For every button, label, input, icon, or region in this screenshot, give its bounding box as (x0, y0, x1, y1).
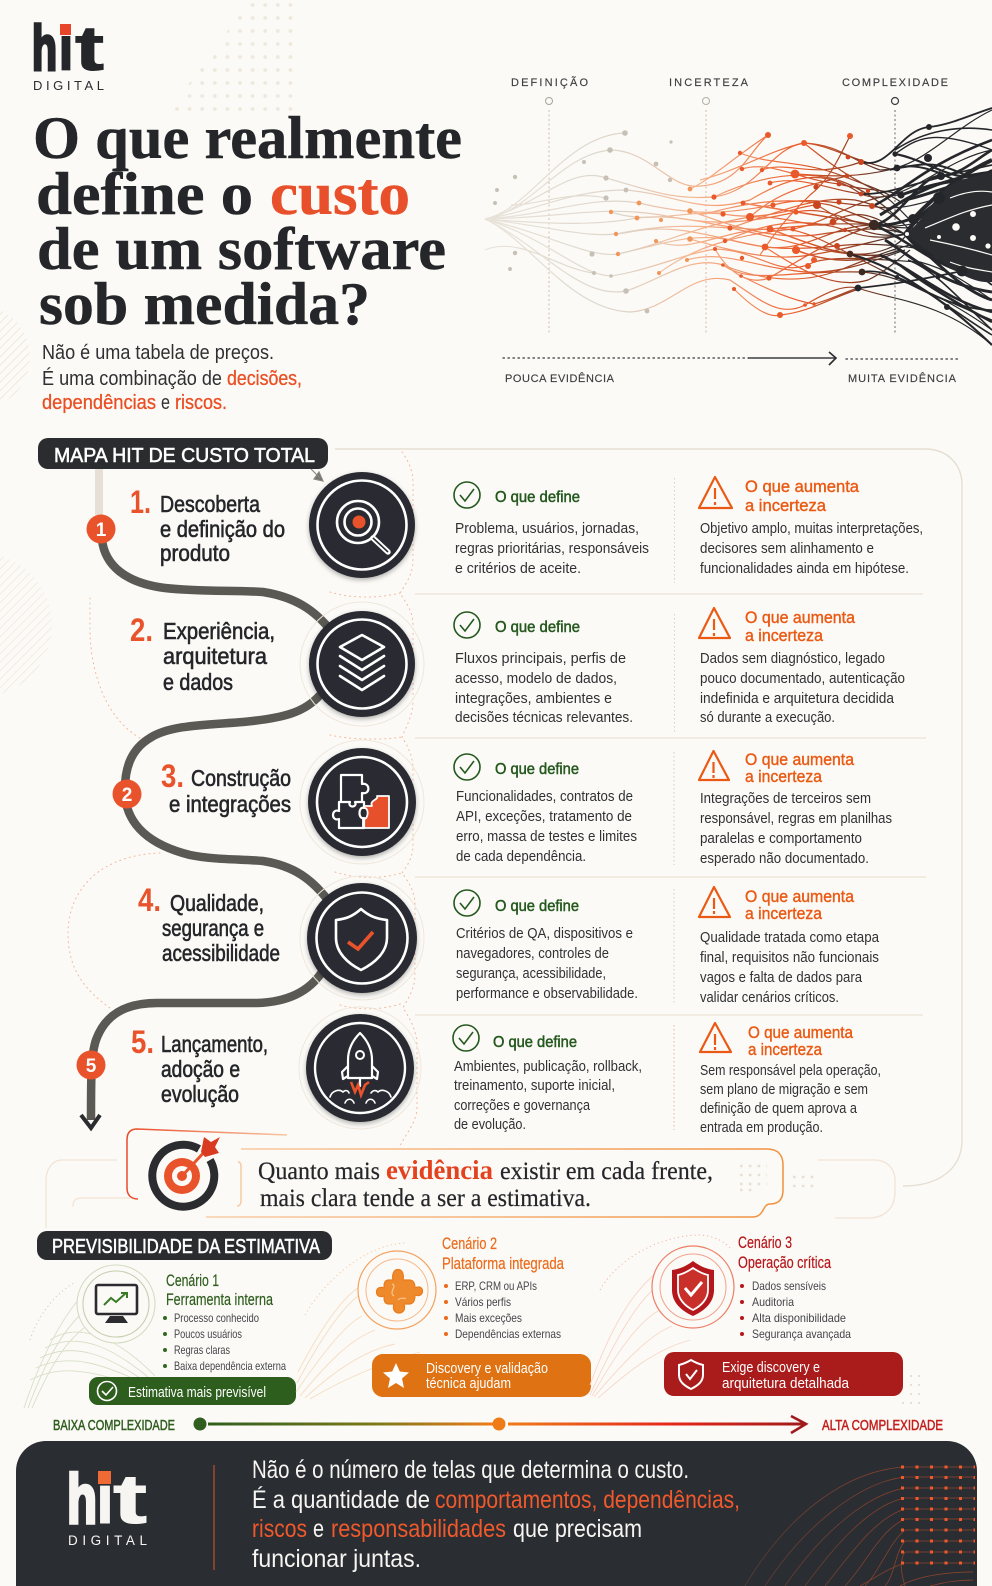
what defines 4: Critérios de QA, dispositivos e (456, 926, 633, 942)
uncertainty 4: validar cenários críticos. (700, 990, 839, 1006)
what defines 5: de evolução. (454, 1117, 526, 1133)
uncertainty 3: a incerteza (745, 767, 822, 786)
scenario 3 text: Segurança avançada (752, 1327, 851, 1341)
badge 5: 5 (86, 1056, 97, 1077)
decorative curves (590, 1274, 690, 1398)
footer banner (16, 1441, 977, 1586)
callout text: evidência (386, 1155, 493, 1185)
scenario 3 (590, 1233, 922, 1403)
step 5 title: adoção e (161, 1056, 240, 1082)
badge 1 (86, 514, 116, 544)
callout: evidence (46, 1129, 895, 1228)
uncertainty 3: responsável, regras em planilhas (700, 811, 892, 827)
complexity scale (53, 1416, 943, 1434)
uncertainty 2: pouco documentado, autenticação (700, 671, 905, 687)
footer message: riscos (252, 1515, 307, 1543)
uncertainty 3 (674, 750, 892, 867)
deep orange points (813, 155, 875, 249)
step 1 title: produto (160, 540, 230, 566)
button: discovery: técnica ajudam (426, 1375, 511, 1392)
winding route with numbered markers (76, 469, 332, 1128)
small arrow from pill (311, 469, 323, 481)
step 1 title: 1. (130, 484, 151, 520)
callout text: Quanto mais (258, 1158, 380, 1185)
uncertainty 5: sem plano de migração e sem (700, 1082, 868, 1098)
what defines 2: Fluxos principais, perfis de (455, 651, 626, 667)
scenario 2 text: ERP, CRM ou APIs (455, 1279, 537, 1293)
uncertainty 4: final, requisitos não funcionais (700, 950, 879, 966)
complexity scale: BAIXA COMPLEXIDADE (53, 1417, 175, 1434)
scenario 2 text (442, 1234, 564, 1341)
button: discovery: Discovery e validação (426, 1360, 548, 1377)
uncertainty 2 (674, 608, 905, 733)
what defines 3: Funcionalidades, contratos de (456, 789, 633, 805)
what defines 5: correções e governança (454, 1098, 591, 1114)
scenario 2 (296, 1234, 591, 1399)
scenario 2 text: Dependências externas (455, 1327, 561, 1341)
subtitle: riscos. (175, 392, 227, 414)
section pill: mapa hit (38, 438, 328, 469)
step 3 title (161, 758, 291, 817)
dark tangled curves (850, 108, 992, 345)
what defines 2: integrações, ambientes e (455, 691, 612, 707)
uncertainty 1: decisores sem alinhamento e (700, 541, 874, 557)
scenario 3 text: Dados sensíveis (752, 1279, 826, 1293)
scenario 1 text: Baixa dependência externa (174, 1359, 286, 1373)
curves (485, 110, 992, 345)
gray points (493, 130, 673, 313)
axis labels: COMPLEXIDADE (842, 77, 948, 89)
step 4 title: 4. (138, 882, 161, 918)
row separators (415, 594, 926, 1015)
footer message: funcionar juntas. (252, 1545, 421, 1573)
title: O que realmente (33, 105, 462, 171)
step 1 title (130, 484, 285, 566)
step 2 title: arquitetura (163, 643, 267, 669)
uncertainty 5: a incerteza (748, 1040, 822, 1059)
scenario 1 text: Processo conhecido (174, 1311, 259, 1325)
what defines 5: O que define (493, 1034, 577, 1051)
footer message: comportamentos, dependências, (435, 1486, 740, 1514)
subtitle (42, 342, 302, 414)
step 5 title: 5. (131, 1024, 154, 1060)
icon: shield (300, 876, 424, 1000)
scenario 3 text: Auditoria (752, 1295, 794, 1309)
uncertainty 1 (674, 477, 923, 583)
step 1 title: e definição do (160, 516, 285, 542)
panel outline: mapa hit (335, 449, 962, 1186)
uncertainty 3: Integrações de terceiros sem (700, 791, 871, 807)
uncertainty 3: O que aumenta (745, 750, 854, 769)
section pill: mapa hit: MAPA HIT DE CUSTO TOTAL (54, 445, 315, 467)
scenario 2 text: Vários perfis (455, 1295, 511, 1309)
footer divider (214, 1465, 215, 1570)
step 5 title: Lançamento, (161, 1031, 268, 1057)
uncertainty 5: entrada em produção. (700, 1120, 823, 1136)
step 5 (131, 1007, 881, 1136)
step 3 (161, 740, 892, 867)
footer message (252, 1456, 740, 1573)
axis labels: DEFINIÇÃO (511, 76, 588, 89)
badge 1: 1 (96, 520, 107, 541)
footer decorative arcs and dots (745, 1467, 975, 1586)
what defines 1: O que define (495, 489, 580, 506)
decorative hatch left middle (0, 553, 52, 697)
uncertainty 2: Dados sem diagnóstico, legado (700, 651, 885, 667)
button: exige discovery: arquitetura detalhada (722, 1375, 850, 1392)
icon: shield (652, 1246, 734, 1328)
what defines 1 (454, 482, 649, 577)
uncertainty 3: esperado não documentado. (700, 851, 869, 867)
evidence arrow: POUCA EVIDÊNCIA (505, 372, 615, 385)
uncertainty 2: só durante a execução. (700, 710, 835, 726)
uncertainty 2: indefinida e arquitetura decidida (700, 691, 895, 707)
step 2 title: e dados (163, 669, 233, 695)
badge 2 (112, 780, 142, 808)
decorative curves (24, 1300, 155, 1408)
scenario 2 text: Mais exceções (455, 1311, 522, 1325)
uncertainty 5 (674, 1023, 881, 1136)
uncertainty 5: definição de quem aprova a (700, 1101, 858, 1117)
icon: magnifier (309, 472, 415, 578)
title (33, 105, 462, 337)
orange points (711, 132, 853, 318)
data points (493, 124, 991, 318)
uncertainty 2: a incerteza (745, 626, 823, 645)
uncertainty 4: vagos e falta de dados para (700, 970, 863, 986)
evidence arrow: MUITA EVIDÊNCIA (848, 372, 957, 385)
callout frames (46, 1160, 895, 1228)
logo: hit digital: t (75, 14, 104, 84)
decorative dots (740, 1166, 816, 1190)
step 1 title: Descoberta (160, 491, 260, 517)
evidence arrow (503, 352, 958, 385)
dotted scallop decoration (68, 452, 417, 1146)
what defines 2 (454, 612, 633, 726)
uncertainty 4: O que aumenta (745, 887, 854, 906)
uncertainty 5: Sem responsável pela operação, (700, 1063, 881, 1079)
what defines 2: decisões técnicas relevantes. (455, 710, 633, 726)
light points inside dark mass (905, 211, 991, 249)
what defines 3: API, exceções, tratamento de (456, 809, 632, 825)
light orange points (609, 187, 693, 275)
decorative curves (296, 1288, 420, 1399)
footer message: que precisam (513, 1515, 642, 1543)
uncertainty 3: paralelas e comportamento (700, 831, 862, 847)
what defines 4: segurança, acessibilidade, (456, 966, 606, 982)
scenario 1 (24, 1265, 296, 1408)
what defines 1: e critérios de aceite. (455, 561, 581, 577)
what defines 3: de cada dependência. (456, 849, 586, 865)
step 2 (130, 602, 905, 733)
footer logo: DIGITAL (68, 1533, 147, 1548)
uncertainty 1: Objetivo amplo, muitas interpretações, (700, 521, 923, 537)
step 2 title (130, 612, 275, 695)
route (91, 540, 332, 1120)
icon: target (152, 1137, 220, 1207)
icon: puzzle (300, 740, 424, 864)
step 5 title: evolução (161, 1081, 239, 1107)
step 2 title: Experiência, (163, 618, 275, 644)
arrow head (81, 1115, 100, 1128)
uncertainty 5: O que aumenta (748, 1023, 853, 1042)
decorative dots (902, 1376, 922, 1403)
step 4 title (138, 882, 280, 966)
dark points (847, 124, 967, 310)
subtitle: Não é uma tabela de preços. (42, 342, 274, 364)
scenario 1 text: Cenário 1 (166, 1271, 219, 1290)
icon: rocket (299, 1007, 421, 1129)
footer logo: i (96, 1460, 114, 1538)
decorative dot grid (165, 0, 296, 116)
badge 2: 2 (122, 785, 132, 806)
title: custo (270, 161, 410, 227)
subtitle: decisões, (227, 368, 302, 390)
scenario 2 text: Cenário 2 (442, 1234, 497, 1253)
what defines 1: regras prioritárias, responsáveis (455, 541, 649, 557)
footer message: responsabilidades (331, 1515, 506, 1543)
step 4 title: Qualidade, (170, 890, 264, 916)
what defines 4: performance e observabilidade. (456, 986, 638, 1002)
section pill: previsibilidade: PREVISIBILIDADE DA ESTIMATIVA (52, 1236, 321, 1258)
uncertainty 1: funcionalidades ainda em hipótese. (700, 561, 909, 577)
step 2 title: 2. (130, 612, 153, 648)
axis labels: INCERTEZA (669, 77, 749, 89)
what defines 3 (454, 754, 637, 865)
button: exige discovery: Exige discovery e (722, 1359, 820, 1376)
title: sob medida? (39, 271, 370, 337)
scenario 3 text: Cenário 3 (738, 1233, 792, 1252)
logo: hit digital: i (58, 14, 74, 84)
scenario 3 text: Alta disponibilidade (752, 1311, 846, 1325)
footer logo: t (113, 1460, 147, 1538)
button: estimativa (89, 1377, 296, 1405)
footer logo (67, 1460, 147, 1548)
icon: puzzle (358, 1251, 436, 1329)
what defines 4: navegadores, controles de (456, 946, 609, 962)
logo: hit digital: DIGITAL (33, 78, 104, 93)
what defines 5 (453, 1025, 642, 1133)
title: define o (36, 161, 253, 227)
scenario 1 text: Regras claras (174, 1343, 230, 1357)
callout text (258, 1155, 713, 1212)
scenario 2 text: Plataforma integrada (442, 1254, 564, 1273)
uncertainty 4 (674, 887, 880, 1006)
footer message: É a quantidade de (252, 1485, 430, 1514)
axis labels (511, 76, 948, 333)
uncertainty 1: a incerteza (745, 496, 827, 515)
light start of route (95, 469, 103, 515)
icon: layers (300, 602, 424, 726)
what defines 5: Ambientes, publicação, rollback, (454, 1059, 642, 1075)
what defines 4: O que define (495, 898, 579, 915)
button: estimativa: Estimativa mais previsível (128, 1384, 266, 1401)
scenario 1 text: Ferramenta interna (166, 1290, 273, 1309)
subtitle: É uma combinação de (42, 367, 222, 390)
step 5 title (131, 1024, 268, 1107)
step 3 title: e integrações (169, 791, 291, 817)
icon: monitor (77, 1265, 155, 1343)
logo: hit digital: h (32, 14, 57, 84)
scenario 3 text (738, 1233, 851, 1341)
what defines 1: Problema, usuários, jornadas, (455, 521, 639, 537)
uncertainty 1: O que aumenta (745, 477, 860, 496)
section pill: previsibilidade (37, 1231, 332, 1260)
step 4 title: segurança e (162, 915, 264, 941)
title: de um software (37, 216, 446, 282)
step 1 (130, 472, 923, 583)
footer message: Não é o número de telas que determina o custo. (252, 1456, 689, 1484)
footer logo: h (67, 1460, 97, 1538)
badge 5 (76, 1050, 106, 1080)
scenario 1 text (163, 1271, 286, 1373)
what defines 4 (454, 890, 638, 1002)
step 3 title: 3. (161, 758, 184, 794)
scenario 1 text: Poucos usuários (174, 1327, 242, 1341)
callout text: mais clara tende a ser a estimativa. (260, 1185, 591, 1212)
subtitle: e (161, 392, 170, 414)
what defines 3: erro, massa de testes e limites (456, 829, 637, 845)
what defines 2: O que define (495, 619, 580, 636)
uncertainty 4: a incerteza (745, 904, 822, 923)
uncertainty 2: O que aumenta (745, 608, 856, 627)
step 3 title: Construção (191, 765, 291, 791)
complexity scale: ALTA COMPLEXIDADE (822, 1417, 943, 1434)
what defines 3: O que define (495, 761, 579, 778)
logo: hit digital (32, 14, 104, 93)
footer message: e (313, 1515, 324, 1543)
step 4 title: acessibilidade (162, 940, 280, 966)
decorative hatch left top (0, 305, 30, 409)
button: exige discovery (664, 1352, 903, 1396)
uncertainty 4: Qualidade tratada como etapa (700, 930, 880, 946)
chart: network from evidence to complexity (485, 76, 992, 385)
subtitle: dependências (42, 392, 156, 414)
step 4 (138, 876, 880, 1006)
what defines 2: acesso, modelo de dados, (455, 671, 617, 687)
callout text: existir em cada frente, (500, 1158, 713, 1185)
button: discovery (372, 1354, 591, 1397)
what defines 5: treinamento, suporte inicial, (454, 1078, 615, 1094)
scenario 3 text: Operação crítica (738, 1253, 831, 1272)
